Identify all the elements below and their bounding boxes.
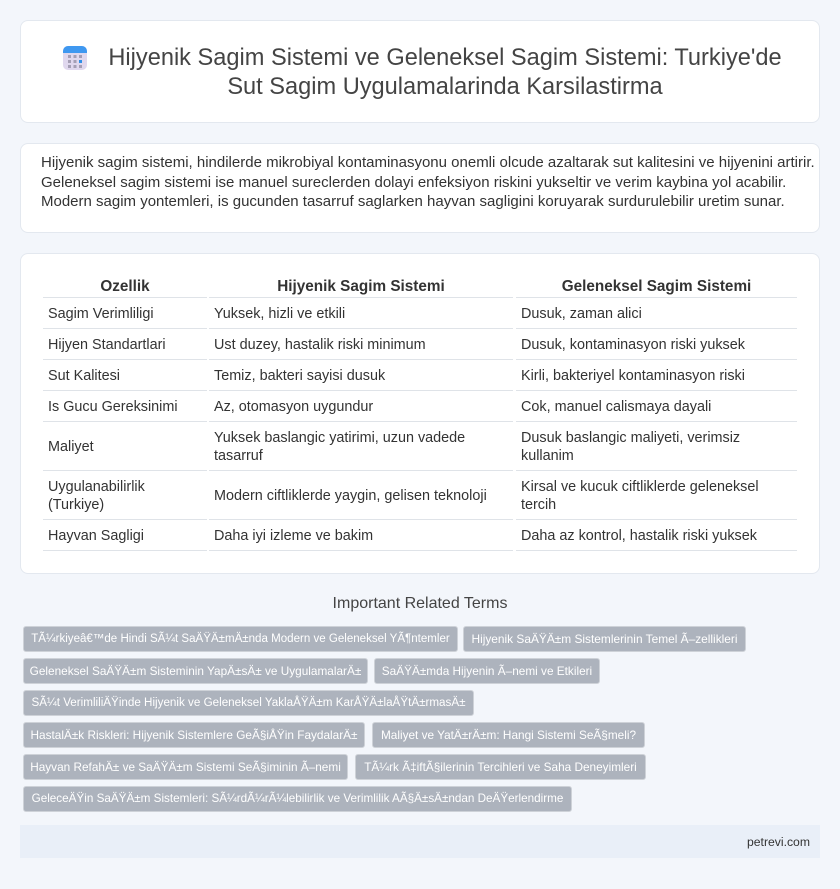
row: Uygulanabilirlik (Turkiye): Kirsal ve kucuk ciftliklerde geleneksel: [521, 479, 759, 495]
row: Hijyen Standartlari: Ust duzey, hastalik riski minimum: [214, 337, 426, 353]
row: Uygulanabilirlik (Turkiye): Uygulanabilirlik: [48, 479, 145, 495]
row: Uygulanabilirlik (Turkiye): [48, 479, 759, 513]
tag: [372, 722, 645, 748]
row: Sut Kalitesi: Kirli, bakteriyel kontaminasyon riski: [521, 368, 745, 384]
row: Hijyen Standartlari: Dusuk, kontaminasyon riski yuksek: [521, 337, 745, 353]
tag: Hayvan RefahÄ± ve SaÄŸÄ±m Sistemi SeÃ§iminin Ã–nemi: [30, 760, 341, 774]
tag: TÃ¼rk Ã‡iftÃ§ilerinin Tercihleri ve Saha Deneyimleri: [364, 760, 637, 774]
tag: [23, 658, 368, 684]
row: Is Gucu Gereksinimi: Az, otomasyon uygundur: [214, 399, 373, 415]
tag: SÃ¼t VerimliliÄŸinde Hijyenik ve Geleneksel YaklaÅŸÄ±m KarÅŸÄ±laÅŸtÄ±rmasÄ±: [31, 696, 466, 709]
row: Maliyet: tasarruf: [214, 448, 263, 464]
tag: [355, 754, 646, 780]
tag: [23, 754, 348, 780]
table header: Geleneksel Sagim Sistemi: Geleneksel Sagim Sistemi: [562, 278, 751, 295]
table header: Hijyenik Sagim Sistemi: Hijyenik Sagim Sistemi: [277, 278, 445, 295]
row: Uygulanabilirlik (Turkiye): Modern ciftliklerde yaygin, gelisen teknoloji: [214, 488, 487, 504]
tag: [23, 722, 365, 748]
row: Is Gucu Gereksinimi: Is Gucu Gereksinimi: [48, 399, 178, 415]
tag: Maliyet ve YatÄ±rÄ±m: Hangi Sistemi SeÃ§meli?: [381, 728, 636, 742]
footer brand: petrevi.com: [747, 835, 810, 849]
row: Hayvan Sagligi: Hayvan Sagligi: [48, 528, 144, 544]
row: Maliyet: Dusuk baslangic maliyeti, verimsiz: [521, 430, 740, 446]
row: Is Gucu Gereksinimi: Cok, manuel calismaya dayali: [521, 399, 711, 415]
intro text: Hijyenik sagim sistemi, hindilerde mikrobiyal kontaminasyonu onemli olcude azaltarak sut kalitesini ve hijyenini artirir.: [41, 154, 815, 171]
row: Sut Kalitesi: [48, 368, 745, 384]
row: Sut Kalitesi: Temiz, bakteri sayisi dusuk: [214, 368, 385, 384]
row: Hayvan Sagligi: Daha az kontrol, hastalik riski yuksek: [521, 528, 757, 544]
tag: TÃ¼rkiyeâ€™de Hindi SÃ¼t SaÄŸÄ±mÄ±nda Modern ve Geleneksel YÃ¶ntemler: [31, 633, 450, 645]
row: Hijyen Standartlari: [48, 337, 745, 353]
title: Hijyenik Sagim Sistemi ve Geleneksel Sagim Sistemi: Turkiye'de: [108, 45, 782, 71]
tag list: [23, 626, 746, 812]
panel: header: [20, 20, 820, 123]
row: Maliyet: kullanim: [521, 448, 574, 464]
heading: related terms: Important Related Terms: [333, 595, 507, 612]
row: Maliyet: Maliyet: [48, 439, 94, 455]
title: Sut Sagim Uygulamalarinda Karsilastirma: [227, 74, 663, 100]
row: Maliyet: [48, 430, 740, 464]
tag: HastalÄ±k Riskleri: Hijyenik Sistemlere GeÃ§iÅŸin FaydalarÄ±: [30, 728, 357, 742]
intro text: Modern sagim yontemleri, is gucunden tasarruf saglarken hayvan sagligini koruyarak surdurulebilir uretim sunar.: [41, 193, 785, 210]
tag: [463, 626, 746, 652]
intro text: Geleneksel sagim sistemi ise manuel sureclerden dolayi enfeksiyon riskini yukseltir ve verim kaybina yol acabilir.: [41, 174, 786, 190]
row: Is Gucu Gereksinimi: [48, 399, 711, 415]
intro text: [41, 154, 815, 210]
title: [108, 45, 782, 100]
tag: GeleceÄŸin SaÄŸÄ±m Sistemleri: SÃ¼rdÃ¼rÃ¼lebilirlik ve Verimlilik AÃ§Ä±sÄ±ndan DeÄŸerlendirme: [32, 792, 563, 805]
row: Uygulanabilirlik (Turkiye): (Turkiye): [48, 497, 104, 513]
tag: [374, 658, 600, 684]
icon: calendar: [63, 46, 87, 70]
row: Sut Kalitesi: Sut Kalitesi: [48, 368, 120, 384]
panel: comparison table: [20, 253, 820, 574]
row: Uygulanabilirlik (Turkiye): tercih: [521, 497, 556, 513]
panel: intro: [20, 143, 820, 233]
tag: [23, 786, 572, 812]
row: Hayvan Sagligi: [48, 528, 757, 544]
table header: Ozellik: Ozellik: [100, 278, 150, 295]
row: Maliyet: Yuksek baslangic yatirimi, uzun vadede: [214, 430, 465, 446]
row: Sagim Verimliligi: Sagim Verimliligi: [48, 306, 154, 322]
tag: Geleneksel SaÄŸÄ±m Sisteminin YapÄ±sÄ± ve UygulamalarÄ±: [30, 664, 361, 678]
tag: Hijyenik SaÄŸÄ±m Sistemlerinin Temel Ã–zellikleri: [471, 632, 738, 646]
tag: SaÄŸÄ±mda Hijyenin Ã–nemi ve Etkileri: [382, 664, 592, 678]
row: Sagim Verimliligi: Dusuk, zaman alici: [521, 306, 642, 322]
tag: [23, 690, 474, 716]
row: Sagim Verimliligi: [48, 306, 642, 322]
row: Sagim Verimliligi: Yuksek, hizli ve etkili: [214, 306, 345, 322]
row: Hayvan Sagligi: Daha iyi izleme ve bakim: [214, 528, 373, 544]
tag: [23, 626, 458, 652]
footer: [20, 825, 820, 858]
row: Hijyen Standartlari: Hijyen Standartlari: [48, 337, 166, 353]
